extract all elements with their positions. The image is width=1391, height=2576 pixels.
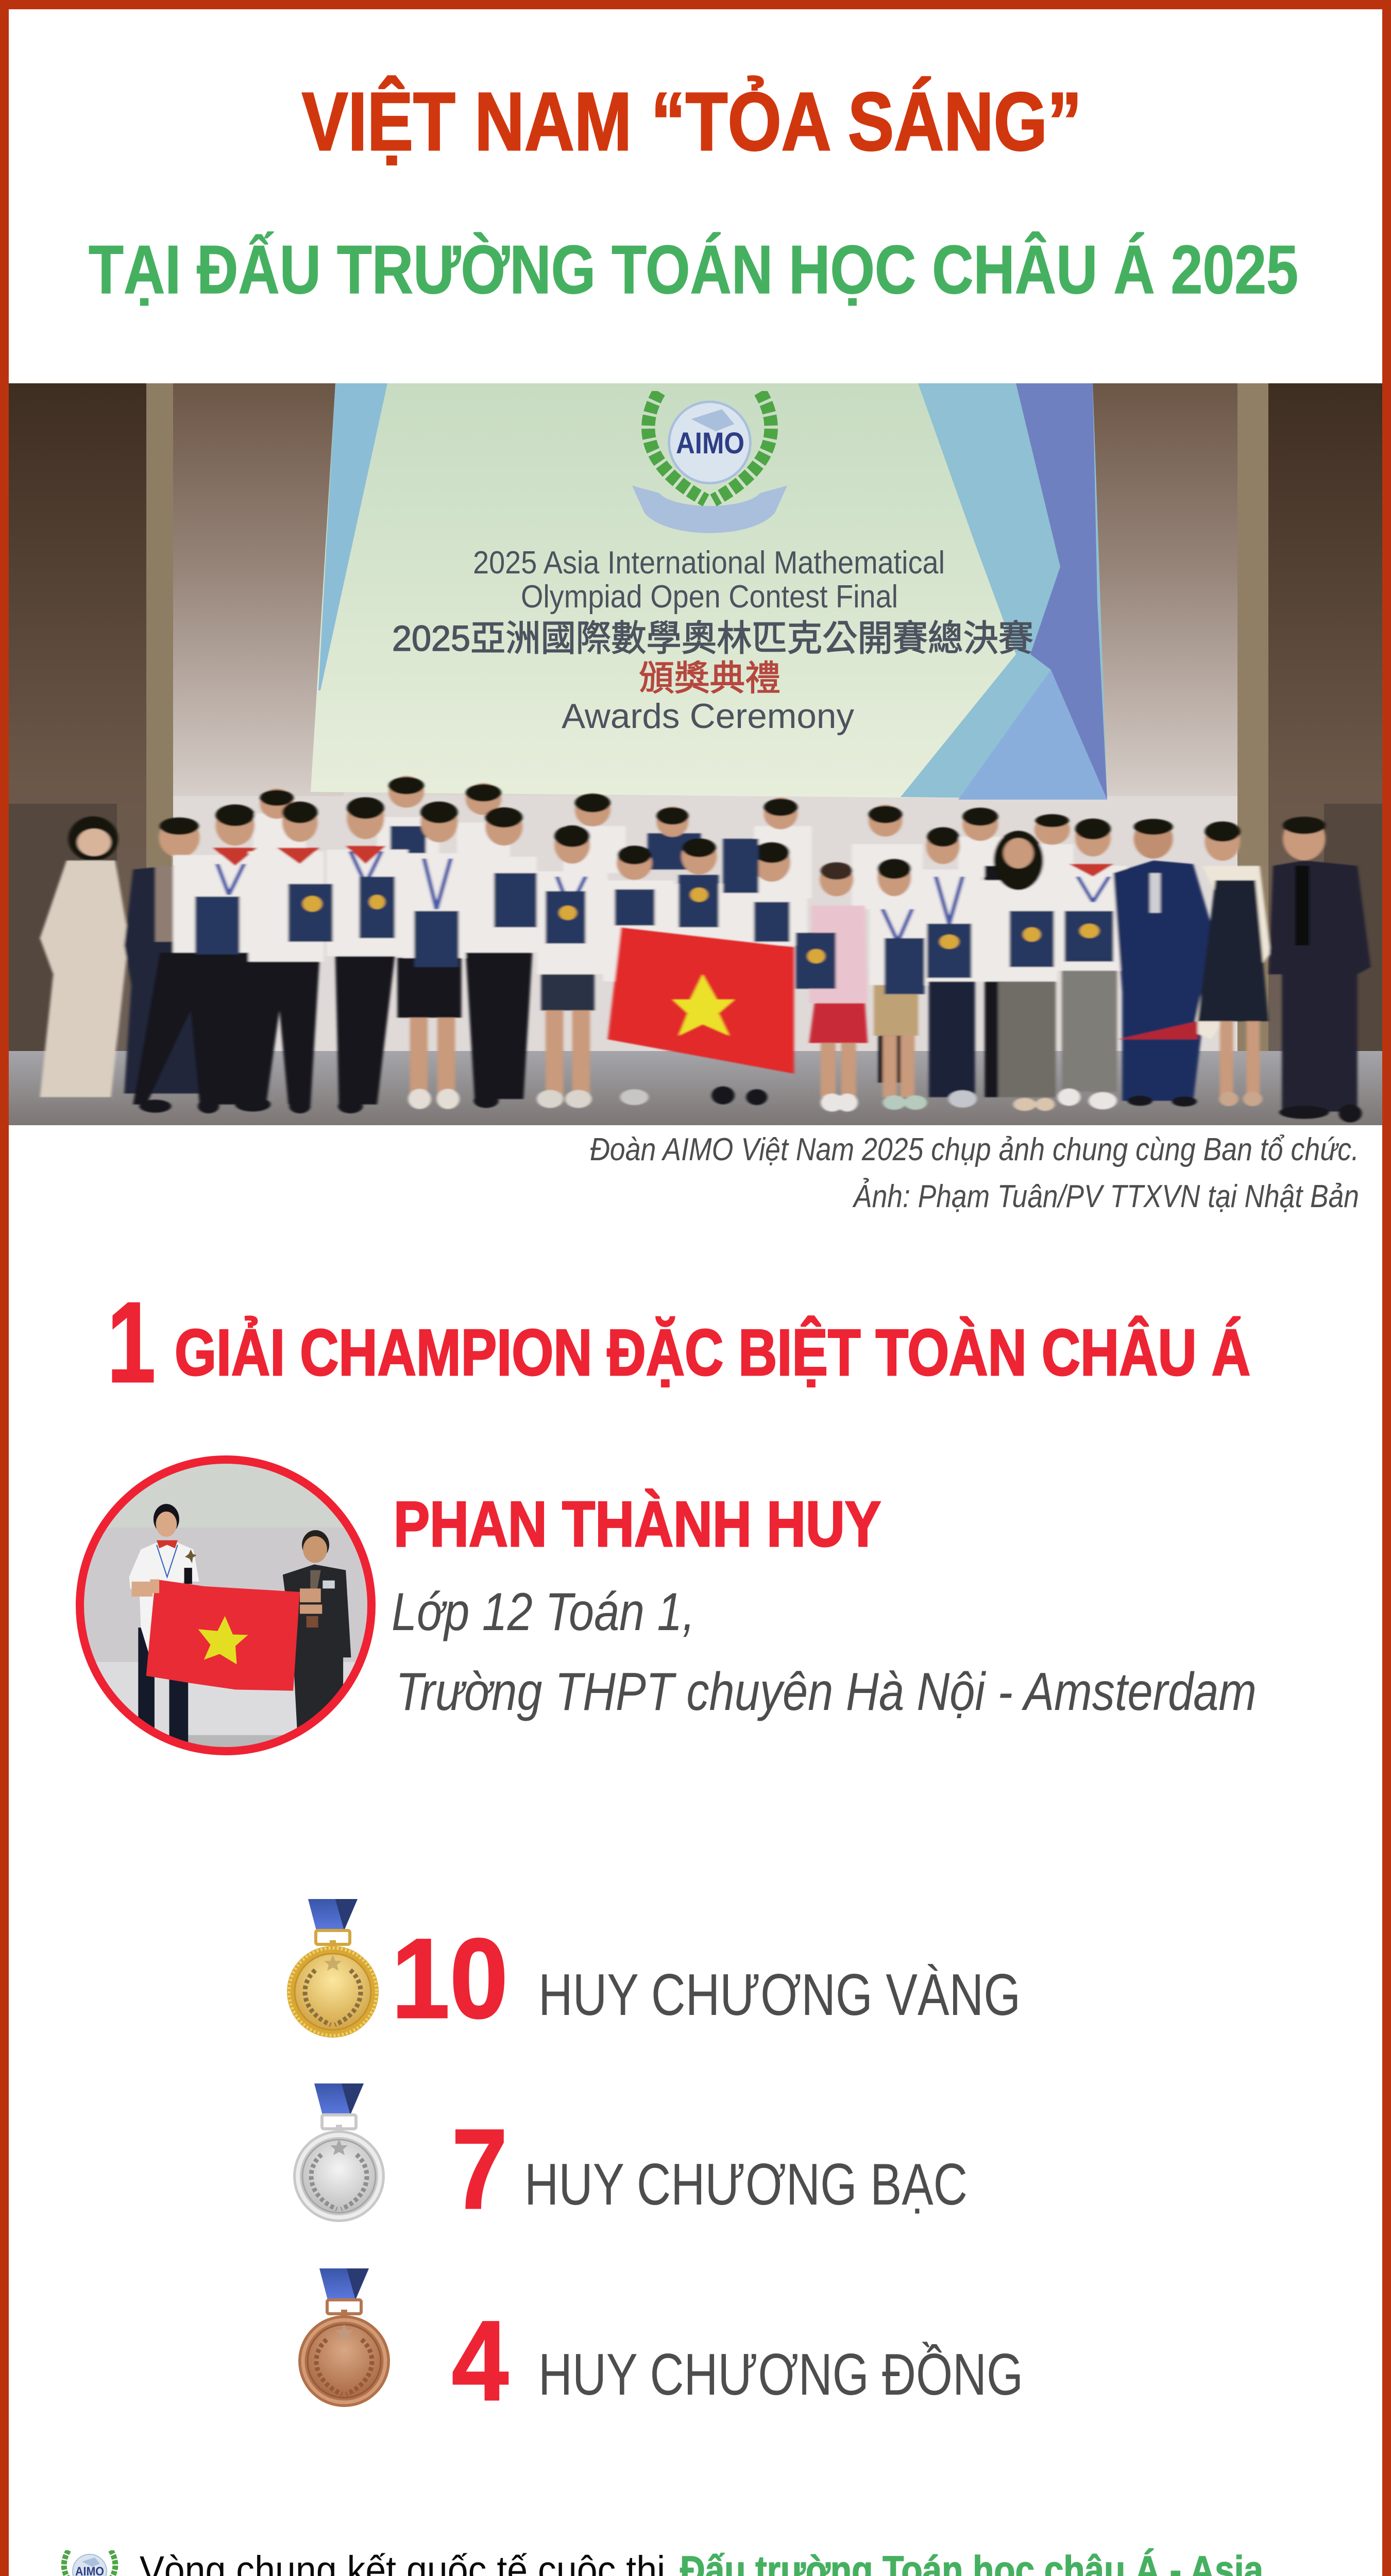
portrait photo in circle: [75, 1455, 377, 1758]
icon: AIMO logo: [57, 2550, 122, 2576]
screen text: Olympiad Open Contest Final: [521, 579, 898, 615]
silver label: HUY CHƯƠNG BẠC: [524, 2152, 968, 2217]
screen text: 2025亞洲國際數學奧林匹克公開賽總決賽: [392, 618, 1033, 658]
student: [129, 1504, 199, 1742]
certificate seals: [302, 888, 1099, 963]
presenter: [283, 1530, 351, 1731]
man in dark suit, left: [124, 818, 204, 1094]
title line 1: VIỆT NAM “TỎA SÁNG”: [302, 75, 1082, 167]
bronze label: HUY CHƯƠNG ĐỒNG: [538, 2342, 1023, 2408]
bullet 1 text: [140, 2548, 1264, 2576]
gold medal row: [287, 1899, 1021, 2042]
Vietnamese flag: [608, 927, 794, 1074]
class: Lớp 12 Toán 1,: [392, 1582, 695, 1642]
flag: [146, 1579, 300, 1691]
back row: [253, 776, 1074, 1097]
certificates: [195, 839, 1113, 994]
icon: bronze medal: [298, 2268, 390, 2407]
photo caption: [590, 1132, 1359, 1214]
front row students: [133, 797, 1127, 1105]
bronze medal row: [298, 2268, 1023, 2424]
winner details: [392, 1489, 1257, 1722]
AIMO logo on screen: AIMO: [676, 427, 744, 460]
screen text: [392, 545, 1033, 736]
delegation group: [40, 776, 1370, 1123]
bullet 1: [57, 2548, 1264, 2576]
bronze count: 4: [452, 2297, 508, 2424]
gold count: 10: [392, 1915, 508, 2042]
title: [89, 75, 1298, 308]
silver count: 7: [452, 2106, 507, 2232]
projection screen: [311, 383, 1107, 800]
number 1: 1: [107, 1279, 156, 1406]
icon: silver medal: [293, 2083, 385, 2222]
school: Trường THPT chuyên Hà Nội - Amsterdam: [396, 1662, 1257, 1722]
AIMO logo on screen: [632, 392, 787, 533]
dignitaries right: [1113, 817, 1370, 1112]
lanyards: [217, 852, 1109, 942]
group photo: [9, 383, 1382, 1125]
screen text: 2025 Asia International Mathematical: [473, 545, 945, 581]
champion heading: [107, 1279, 1250, 1406]
winner name: PHAN THÀNH HUY: [394, 1489, 881, 1560]
shoes: [139, 1087, 1362, 1123]
icon: gold medal: [287, 1899, 379, 2038]
screen text: 頒獎典禮: [639, 659, 781, 698]
woman in ao dai: [40, 816, 129, 1097]
silver medal row: [293, 2083, 968, 2232]
screen text: Awards Ceremony: [562, 697, 854, 736]
gold label: HUY CHƯƠNG VÀNG: [538, 1962, 1021, 2028]
